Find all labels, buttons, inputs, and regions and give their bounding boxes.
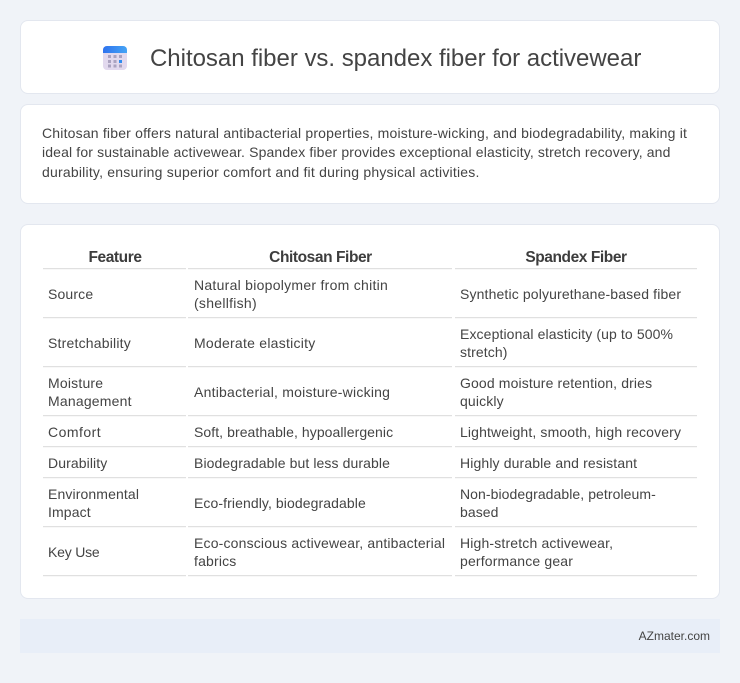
comparison table: Moisture [48, 375, 103, 391]
comparison table: Eco-conscious activewear, antibacterial [194, 535, 445, 551]
comparison table: Source [48, 286, 93, 302]
comparison table: Comfort [48, 424, 101, 440]
comparison table: fabrics [194, 553, 236, 569]
footer bar [20, 619, 720, 653]
comparison table: Non-biodegradable, petroleum- [460, 486, 656, 502]
comparison table: Exceptional elasticity (up to 500% [460, 326, 673, 342]
description text [42, 125, 687, 180]
comparison table: Spandex Fiber [525, 249, 627, 266]
comparison table: Key Use [48, 544, 100, 560]
footer source label: AZmater.com [639, 629, 710, 643]
description panel [20, 104, 720, 204]
comparison table: Antibacterial, moisture-wicking [194, 384, 390, 400]
title: Chitosan fiber vs. spandex fiber for activewear [150, 45, 641, 72]
comparison table: based [460, 504, 498, 520]
comparison table: stretch) [460, 344, 508, 360]
comparison table: Soft, breathable, hypoallergenic [194, 424, 393, 440]
comparison table: High-stretch activewear, [460, 535, 613, 551]
comparison table: performance gear [460, 553, 573, 569]
description text: ideal for sustainable activewear. Spandex fiber provides exceptional elasticity, stretch recovery, and [42, 144, 671, 160]
comparison table: (shellfish) [194, 295, 257, 311]
table panel [20, 224, 720, 599]
comparison table: Impact [48, 504, 91, 520]
comparison table: Highly durable and resistant [460, 455, 637, 471]
comparison table: Environmental [48, 486, 139, 502]
comparison table: Synthetic polyurethane-based fiber [460, 286, 681, 302]
comparison table: Stretchability [48, 335, 131, 351]
comparison table: Eco-friendly, biodegradable [194, 495, 366, 511]
icon: calendar [103, 46, 127, 70]
comparison table: Feature [88, 249, 142, 266]
comparison table: Durability [48, 455, 107, 471]
description text: durability, ensuring superior comfort and fit during physical activities. [42, 164, 480, 180]
comparison table: Lightweight, smooth, high recovery [460, 424, 681, 440]
comparison table: Chitosan Fiber [269, 249, 372, 266]
description text: Chitosan fiber offers natural antibacterial properties, moisture-wicking, and biodegradability, making it [42, 125, 687, 141]
comparison table: Natural biopolymer from chitin [194, 277, 388, 293]
comparison table: Biodegradable but less durable [194, 455, 390, 471]
header panel [20, 20, 720, 94]
comparison table: Moderate elasticity [194, 335, 315, 351]
comparison table: Good moisture retention, dries [460, 375, 652, 391]
comparison table: Management [48, 393, 132, 409]
comparison table: quickly [460, 393, 504, 409]
